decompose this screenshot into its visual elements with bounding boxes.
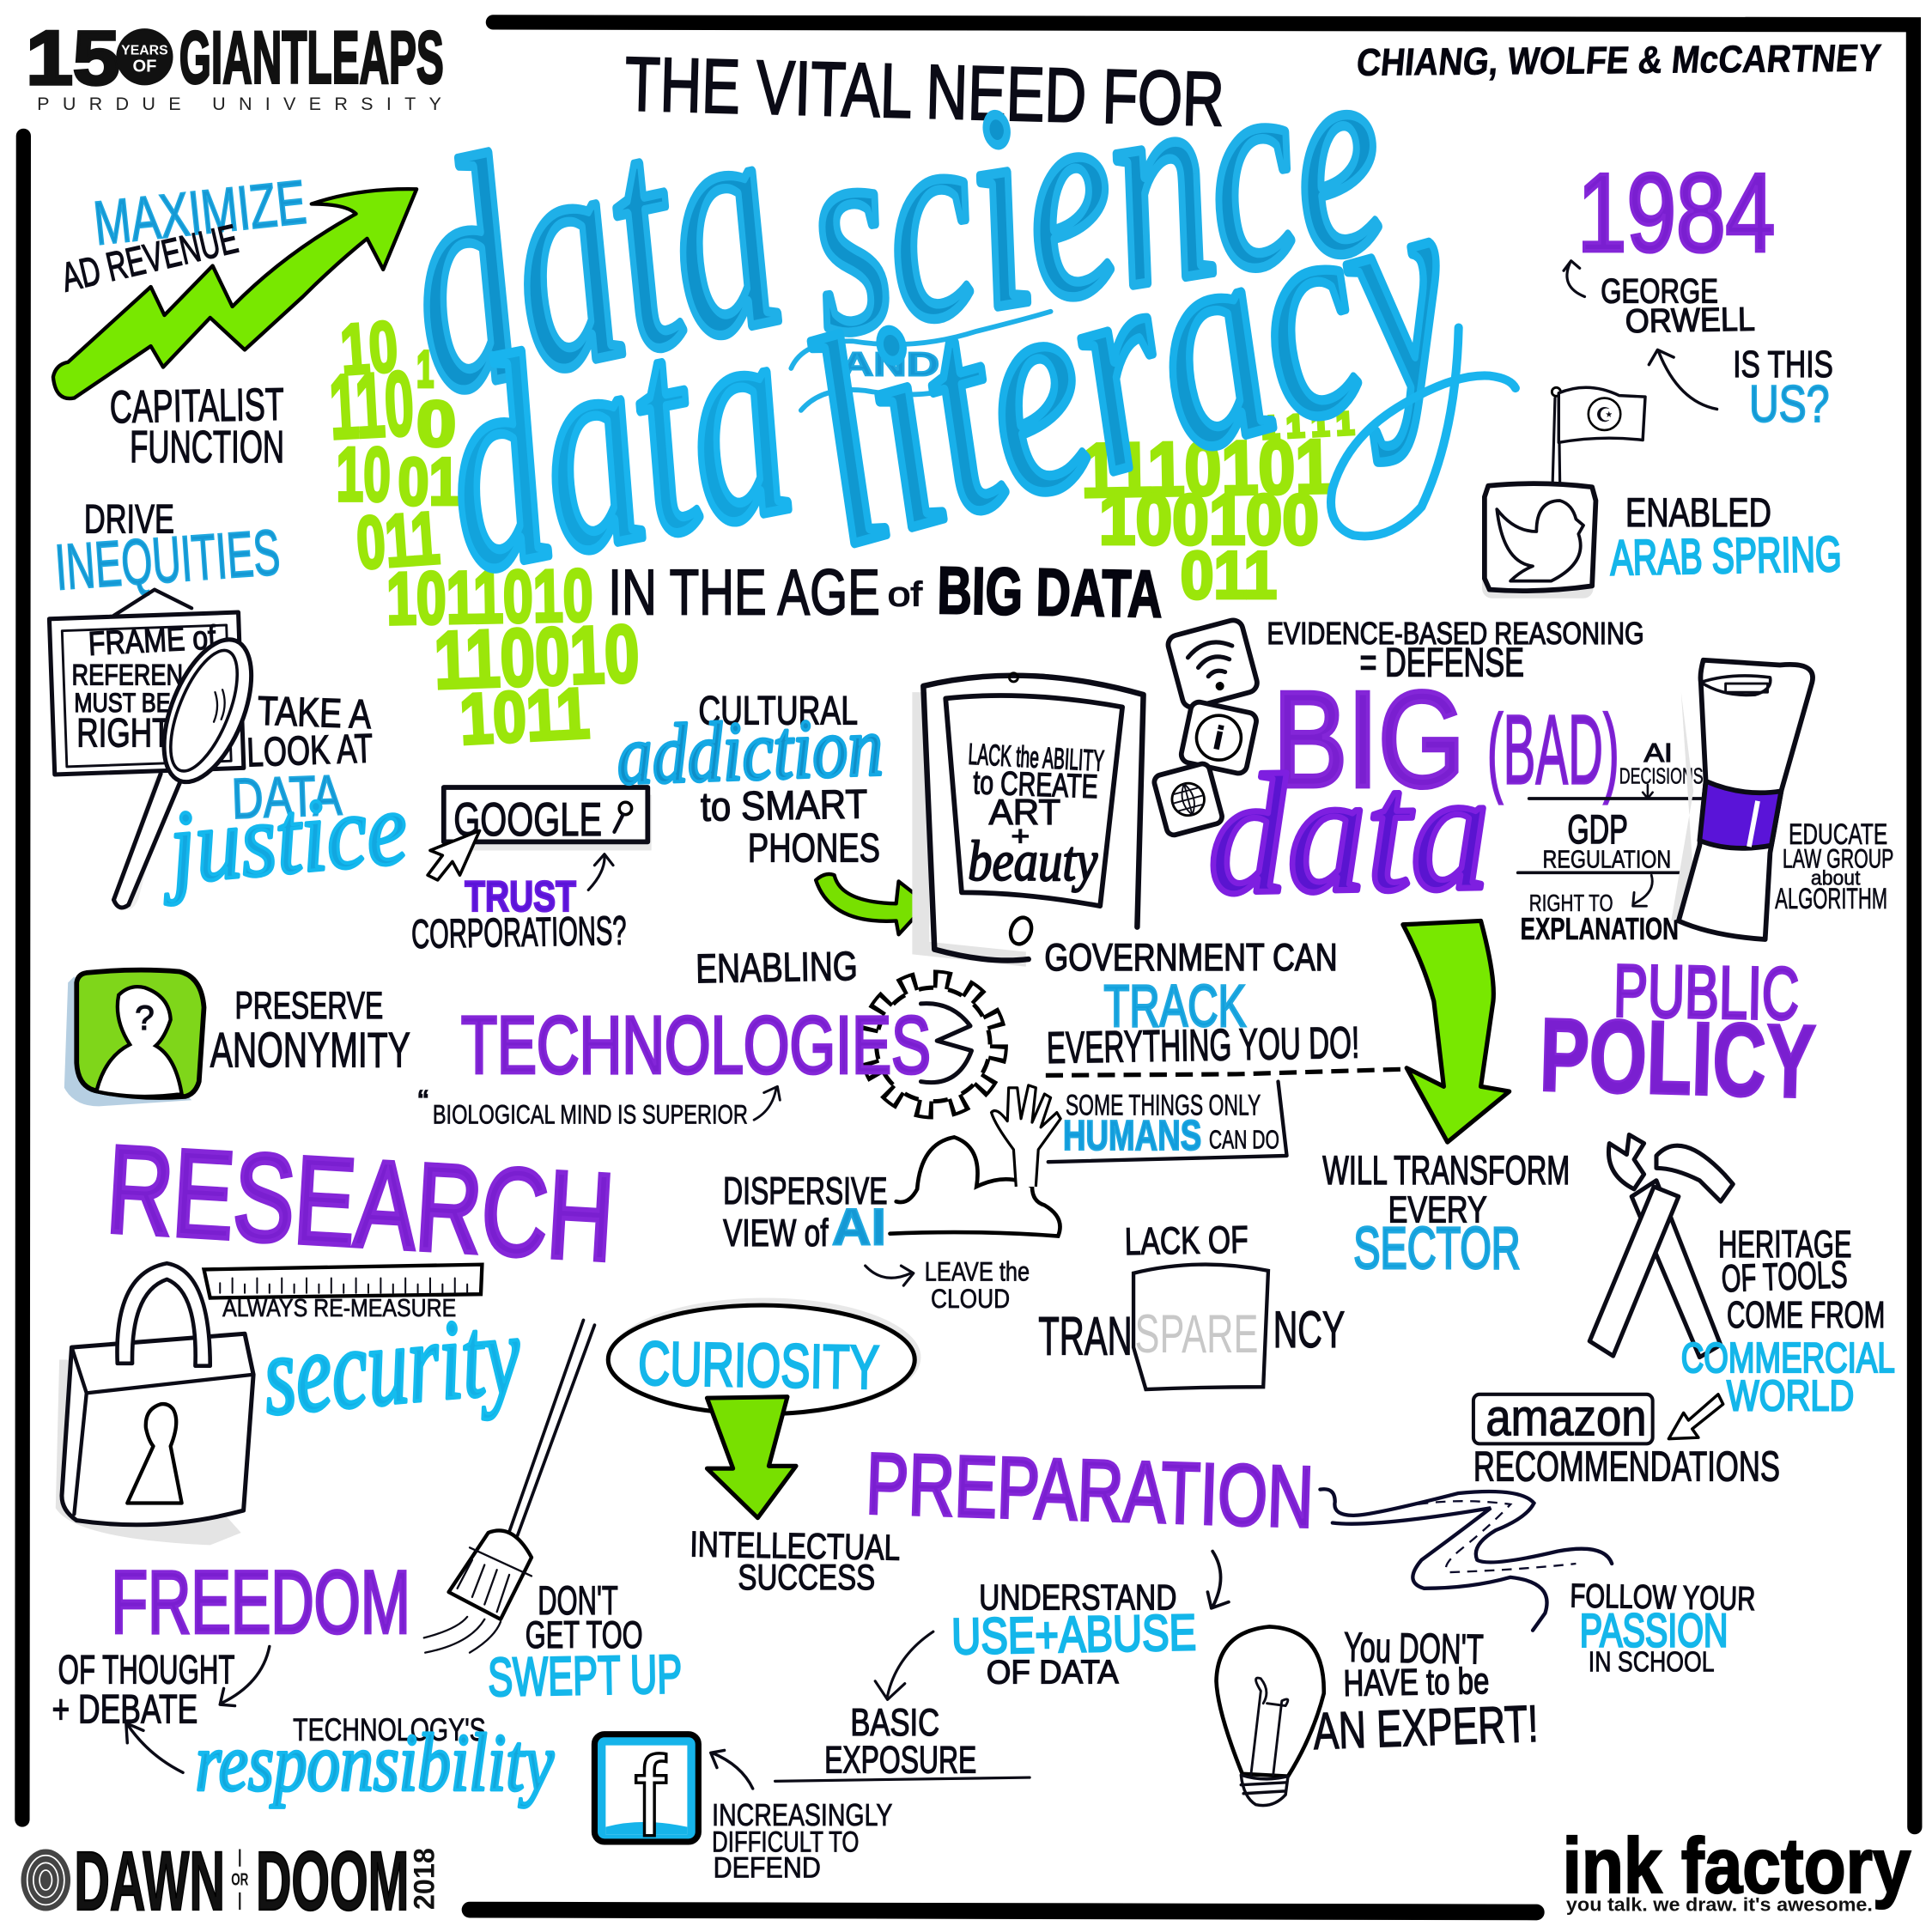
subtitle: in the age of big data: of (888, 574, 923, 613)
phone text: to CREATE (973, 764, 1098, 805)
panel: heritage of tools from commercial world: OF TOOLS (1721, 1254, 1848, 1300)
icon: google search box: GOOGLE (453, 793, 602, 846)
binary digits: left cluster: 1011010 (386, 555, 593, 641)
label: understand use + abuse of data (951, 1577, 1197, 1692)
binary digits: left cluster: 110010 (433, 609, 641, 707)
panel: freedom of thought and debate (52, 1552, 410, 1733)
panel: freedom of thought and debate: + DEBATE (52, 1687, 197, 1733)
icon: big green down arrow (1403, 920, 1510, 1142)
icon: anonymous profile (64, 970, 204, 1106)
panel: big bad data heading: BIG (1273, 664, 1465, 816)
icon: flag (1552, 387, 1645, 486)
panel: 1984 george orwell: ORWELL (1625, 301, 1755, 340)
panel: lack of transparency: NCY (1273, 1300, 1345, 1358)
panel: will transform every sector (1322, 1148, 1570, 1281)
label: understand use + abuse of data: USE+ABUSE (951, 1604, 1197, 1665)
label: corporations: CORPORATIONS? (411, 908, 627, 957)
binary digits: left cluster: 0 (416, 388, 456, 460)
panel: big bad data heading (1206, 664, 1619, 929)
binary digits: right cluster (1080, 404, 1355, 613)
arrow (1649, 349, 1717, 409)
phone text: LACK the ABILITY (968, 738, 1105, 778)
panel: amazon recommendations (1473, 1388, 1780, 1491)
icon: picture frame (49, 590, 244, 775)
literacy y tail flourish (1331, 327, 1516, 536)
binary digits: right cluster: 1111 (1261, 404, 1355, 446)
panel: evidence-based reasoning: = DEFENSE (1359, 640, 1524, 685)
arrow (588, 854, 613, 890)
arrow (875, 1631, 933, 1699)
icon: info (1180, 701, 1258, 775)
label: capitalist function: CAPITALIST (109, 380, 284, 433)
panel: some things only humans can do: CAN DO (1209, 1126, 1279, 1154)
logo: 150 years of giant leaps, Purdue University: YEARS (121, 43, 168, 58)
icon: thought oval (608, 1298, 920, 1417)
panel: preparation (775, 1436, 1315, 1781)
panel: facebook increasingly difficult to defend: DEFEND (714, 1852, 821, 1885)
icon: fingerprint (21, 1850, 70, 1911)
icon: ruler (204, 1265, 482, 1298)
heading: technologies: TECHNOLOGIES (461, 1000, 931, 1091)
panel: follow your passion in school: IN SCHOOL (1589, 1646, 1715, 1678)
panel: don't get too swept up with broom: GET TOO (526, 1614, 643, 1656)
panel: dispersive view of AI, leave the cloud: LEAVE the (925, 1255, 1030, 1286)
label: basic exposure: EXPOSURE (824, 1739, 976, 1781)
frame text: RIGHT (76, 710, 171, 756)
panel: big bad data heading: data (1206, 736, 1492, 929)
arrow (1207, 1552, 1229, 1608)
panel: AI decisions, GDP regulation, right to explanation: EXPLANATION (1521, 911, 1679, 946)
panel: cultural addiction to smart phones: PHONES (748, 825, 880, 871)
panel: curiosity leads to intellectual success: INTELLECTUAL (690, 1523, 901, 1568)
label: trust: TRUST (465, 872, 576, 920)
logo: 150 years of giant leaps, Purdue University: PURDUE UNIVERSITY (37, 93, 441, 114)
label: take a look at (246, 689, 374, 776)
panel: technology's responsibility: responsibility (195, 1716, 555, 1807)
subtitle: in the age of big data (608, 554, 1163, 632)
panel: some things only humans can do (1048, 1082, 1287, 1162)
phone text: beauty (968, 830, 1098, 893)
binary digits: left cluster: 1011 (458, 672, 592, 760)
label: take a look at: LOOK AT (246, 726, 374, 776)
panel: follow your passion in school: PASSION (1580, 1603, 1728, 1656)
binary digits: left cluster: 10 (337, 306, 400, 390)
panel: AI decisions, GDP regulation, right to explanation: REGULATION (1543, 847, 1671, 874)
heading: preparation: PREPARATION (865, 1436, 1315, 1546)
panel: government can track everything: TRACK (1104, 972, 1246, 1039)
panel: technology's responsibility: TECHNOLOGY'S (293, 1711, 486, 1747)
label: ad revenue: AD REVENUE (58, 216, 242, 301)
label: data justice: DATA (231, 764, 343, 831)
panel: AI decisions, GDP regulation, right to explanation: RIGHT TO (1529, 890, 1613, 916)
panel: drive inequities: INEQUITIES (52, 516, 283, 604)
panel: don't get too swept up with broom: DON'T (538, 1578, 618, 1624)
panel: facebook increasingly difficult to defend: INCREASINGLY (712, 1797, 892, 1832)
logo: 150 years of giant leaps, Purdue University: GIANTLEAPS (179, 16, 444, 99)
panel: 1984 george orwell (1564, 151, 1833, 433)
label: understand use + abuse of data: OF DATA (987, 1655, 1119, 1692)
script word: data: data (375, 35, 806, 462)
icon: info: i (1211, 719, 1227, 756)
icon: outlined arrow (1668, 1394, 1723, 1439)
label: basic exposure: BASIC (850, 1702, 939, 1744)
icon: twitter bird tile (1482, 483, 1595, 598)
panel: cultural addiction to smart phones (616, 689, 927, 934)
panel: cultural addiction to smart phones: addiction (616, 701, 884, 803)
panel: facebook increasingly difficult to defend (594, 1734, 892, 1885)
panel: heritage of tools from commercial world (1589, 1134, 1895, 1420)
panel: don't get too swept up with broom (424, 1320, 683, 1708)
heading: research: RESEARCH (104, 1120, 617, 1287)
icon: flag: ☪ (1595, 404, 1613, 426)
heading: curiosity: CURIOSITY (638, 1329, 880, 1402)
panel: follow your passion in school: FOLLOW YOUR (1570, 1577, 1756, 1618)
panel: follow your passion in school (1570, 1577, 1756, 1678)
script: security: security (258, 1291, 526, 1439)
icons: wifi, info, globe tiles (1152, 618, 1259, 836)
panel: freedom of thought and debate: FREEDOM (112, 1552, 410, 1652)
label: capitalist function: FUNCTION (130, 422, 284, 472)
heading: public policy: POLICY (1539, 997, 1817, 1120)
panel: twitter enabled arab spring (1482, 387, 1842, 598)
phone text: ART (989, 792, 1060, 832)
icon: curved green arrow (816, 874, 927, 934)
panel: enabling technologies with gear: ENABLING (696, 944, 858, 992)
panel: lack of transparency: TRAN (1038, 1307, 1133, 1367)
panel: dispersive view of AI, leave the cloud (723, 1170, 1030, 1314)
binary digits: right cluster: 011 (1181, 539, 1277, 613)
icon: lightbulb (1217, 1626, 1324, 1806)
frame text: FRAME of (88, 619, 216, 663)
panel: technology's responsibility (126, 1711, 555, 1807)
panel: curiosity leads to intellectual success: SUCCESS (738, 1557, 875, 1597)
binary digits: left cluster: 01 (398, 445, 460, 519)
panel: lightbulb you don't have to be an expert: AN EXPERT! (1312, 1694, 1540, 1760)
panel: frame of reference with magnifying glass (49, 590, 411, 910)
binary digits: left cluster: 1 (416, 340, 434, 398)
icon: security bag with keyhole (56, 1263, 253, 1545)
icon: phone body (912, 673, 1144, 967)
label: take a look at: TAKE A (257, 689, 373, 738)
panel: lack of transparency (1038, 1219, 1345, 1389)
panel: google trust corporations (411, 787, 652, 957)
binary digits: left cluster: 10 (337, 431, 391, 517)
subtitle: in the age of big data: BIG DATA (937, 554, 1163, 632)
logo: 150 years of giant leaps, Purdue University (26, 15, 444, 114)
panel: government can track everything: EVERYTHING YOU DO! (1046, 1018, 1360, 1072)
panel: will transform every sector: WILL TRANSFORM (1322, 1148, 1570, 1194)
script word: data, second line: data (416, 246, 813, 635)
panel: cultural addiction to smart phones: to SMART (700, 781, 868, 830)
icon: facebook tile: f (635, 1734, 666, 1861)
script word: literacy: literacy (772, 118, 1487, 609)
binary digits: left cluster: 011 (354, 497, 442, 585)
panel: heritage of tools from commercial world: HERITAGE (1718, 1224, 1851, 1266)
icon: wifi (1166, 618, 1259, 709)
label: educate law group about algorithm: about (1811, 867, 1861, 890)
icon: anonymous profile: ? (135, 999, 155, 1037)
label: educate law group about algorithm: EDUCATE (1789, 818, 1887, 851)
label: capitalist function (109, 380, 284, 472)
panel: some things only humans can do: SOME THINGS ONLY (1066, 1089, 1261, 1121)
label: educate law group about algorithm (1775, 818, 1893, 915)
quote: biological mind is superior (418, 1084, 780, 1130)
heading: 1984: 1984 (1577, 151, 1775, 275)
panel: 1984 george orwell: US? (1749, 374, 1830, 433)
panel: security bag and ruler (56, 1263, 526, 1545)
icon: magnifying glass (113, 628, 269, 910)
phone text (968, 738, 1105, 893)
panel: will transform every sector: EVERY (1388, 1190, 1487, 1231)
logo: 150 years of giant leaps, Purdue University: 15 (26, 15, 120, 100)
panel: twitter enabled arab spring: ENABLED (1625, 490, 1771, 536)
panel: smartphone with lack the ability to create art + beauty (912, 673, 1144, 967)
panel: drive inequities (52, 496, 283, 604)
label: understand use + abuse of data: UNDERSTAND (979, 1577, 1176, 1617)
quote: biological mind is superior: BIOLOGICAL MIND IS SUPERIOR (433, 1099, 748, 1130)
panel: government can track everything (1044, 937, 1403, 1075)
binary digits: left cluster: 110 (327, 352, 416, 459)
panel: evidence-based reasoning (1267, 616, 1644, 685)
frame text: MUST BE (74, 687, 171, 718)
title: the vital need for: THE VITAL NEED FOR (623, 40, 1225, 142)
heading: public policy (1539, 950, 1817, 1120)
heading: public policy: PUBLIC (1613, 950, 1800, 1036)
label: basic exposure (775, 1702, 1030, 1781)
frame text (71, 619, 216, 756)
panel: lack of transparency: LACK OF (1124, 1219, 1249, 1263)
panel: 1984 george orwell: IS THIS (1733, 344, 1833, 386)
panel: maximize ad revenue (53, 167, 416, 472)
panel: security bag and ruler: ALWAYS RE-MEASURE (222, 1295, 456, 1322)
logo: dawn or doom 2018: DAWN (74, 1833, 225, 1928)
panel: some things only humans can do: HUMANS (1063, 1113, 1201, 1159)
logo: 150 years of giant leaps, Purdue University: OF (132, 57, 156, 76)
icon: cursor arrow (428, 830, 480, 880)
frame text: REFEREN (71, 659, 183, 692)
icon: globe (1152, 762, 1224, 836)
logo: dawn or doom 2018: 2018 (408, 1848, 440, 1910)
panel: heritage of tools from commercial world: WORLD (1727, 1371, 1854, 1420)
panel: AI decisions, GDP regulation, right to explanation: DECISIONS (1619, 765, 1704, 789)
panel: dispersive view of AI, leave the cloud: CLOUD (931, 1283, 1010, 1314)
word: and with flourishes: AND (841, 347, 939, 384)
panel: will transform every sector: SECTOR (1353, 1214, 1521, 1281)
panel: evidence-based reasoning: EVIDENCE-BASED REASONING (1267, 616, 1644, 651)
panel: preserve anonymity (64, 970, 410, 1106)
label: data justice: justice (155, 770, 411, 907)
panel: lightbulb you don't have to be an expert (1217, 1625, 1540, 1806)
arrow (1564, 261, 1584, 296)
quote: biological mind is superior: “ (418, 1084, 428, 1120)
icon: facebook tile (594, 1734, 698, 1861)
word: and with flourishes (791, 312, 1051, 410)
logo: dawn or doom 2018: OR (231, 1870, 249, 1889)
panel: government can track everything: GOVERNMENT CAN (1044, 937, 1338, 979)
binary digits: right cluster: 100100 (1099, 478, 1319, 559)
panel: dispersive view of AI, leave the cloud: AI (832, 1198, 886, 1256)
panel: AI decisions, GDP regulation, right to explanation (1518, 739, 1704, 946)
panel: enabling technologies with gear (418, 944, 999, 1130)
icon: crossed hammer and wrench (1589, 1134, 1733, 1358)
icon: broom (424, 1320, 594, 1653)
main script heading: data science and data literacy (375, 0, 1516, 635)
panel: freedom of thought and debate: OF THOUGHT (58, 1648, 235, 1693)
binary digits: right cluster: 1110101 (1080, 423, 1333, 513)
panel: lightbulb you don't have to be an expert: HAVE to be (1343, 1661, 1490, 1704)
phone text: + (1012, 821, 1030, 852)
icon: cloud with hand (890, 1085, 1060, 1236)
text: (BAD) (1487, 696, 1619, 805)
panel: 1984 george orwell: GEORGE (1601, 272, 1718, 311)
subtitle: in the age of big data: IN THE AGE (608, 556, 880, 628)
icon: winding road (1320, 1489, 1612, 1631)
panel: dispersive view of AI, leave the cloud: VIEW of (723, 1212, 829, 1255)
binary digits: left cluster (327, 306, 641, 760)
panel: lack of transparency: SPARE (1134, 1304, 1258, 1364)
heading: maximize: MAXIMIZE (91, 167, 309, 258)
panel: dispersive view of AI, leave the cloud: DISPERSIVE (723, 1170, 888, 1212)
icon: green zigzag arrow (53, 189, 416, 398)
panel: AI decisions, GDP regulation, right to explanation: AI (1644, 739, 1673, 768)
logo: ink factory: you talk. we draw. it's awesome. (1566, 1894, 1873, 1916)
icon: green down arrow (707, 1397, 796, 1518)
logo: dawn or doom 2018 (21, 1833, 440, 1928)
panel: don't get too swept up with broom: SWEPT UP (488, 1644, 683, 1708)
icon: translucent sheet (1133, 1265, 1268, 1389)
panel: cultural addiction to smart phones: CULTURAL (698, 689, 858, 734)
icon: gear (868, 979, 999, 1110)
logo: dawn or doom 2018: DOOM (256, 1833, 409, 1928)
arrow (711, 1750, 753, 1789)
panel: curiosity leads to intellectual success (608, 1298, 920, 1597)
icon: amazon box: amazon (1485, 1388, 1646, 1446)
icon: rolled law scroll with purple band (1671, 660, 1813, 939)
panel: lightbulb you don't have to be an expert: You DON'T (1344, 1625, 1484, 1674)
panel: drive inequities: DRIVE (84, 496, 174, 542)
panel: amazon recommendations: RECOMMENDATIONS (1473, 1444, 1780, 1491)
panel: facebook increasingly difficult to defend: DIFFICULT TO (712, 1826, 859, 1858)
panel: AI decisions, GDP regulation, right to explanation: GDP (1567, 807, 1628, 853)
panel: preserve anonymity: ANONYMITY (210, 1023, 410, 1078)
panel: preserve anonymity: PRESERVE (235, 985, 383, 1027)
